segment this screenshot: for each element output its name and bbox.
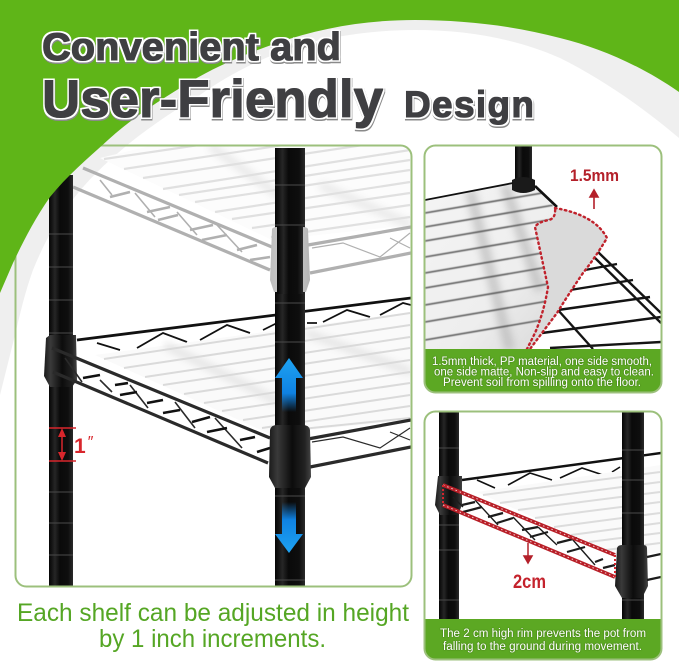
label: 1.5mm: 1.5mm — [570, 166, 619, 185]
caption: height adjustment — [17, 599, 409, 653]
title: User-Friendly — [42, 70, 384, 129]
back wire and zigzag — [462, 453, 661, 488]
lower shelf back wire — [77, 298, 411, 350]
icon: blue down arrow — [275, 502, 303, 553]
lower shelf front rim — [52, 348, 411, 467]
caption bar: liner — [425, 349, 661, 392]
poles — [439, 412, 644, 622]
panel border: rim — [424, 412, 662, 660]
lower shelf liner — [95, 312, 411, 434]
panel: shelf height adjustment — [44, 114, 411, 588]
panel border: liner — [424, 146, 662, 392]
upper shelf wire rim — [73, 168, 411, 273]
1 inch dimension marker — [49, 428, 94, 461]
red dotted rim highlight — [443, 485, 615, 577]
title: Design — [404, 84, 534, 125]
caption bar: liner: Prevent soil from spilling onto the floor. — [443, 377, 641, 389]
green corner shape — [0, 0, 679, 293]
lower connector — [269, 425, 311, 488]
1 inch dimension marker: 1 — [74, 435, 86, 458]
rim wires — [453, 497, 661, 580]
left connector — [44, 335, 77, 387]
caption bar: liner: one side matte, Non-slip and easy to clean. — [434, 366, 654, 378]
1 inch dimension marker: ″ — [88, 434, 94, 451]
upper shelf liner — [100, 146, 410, 238]
curled liner flap — [527, 208, 607, 349]
panel: liner thickness — [425, 146, 661, 350]
centre pole — [275, 148, 305, 588]
caption: height adjustment: Each shelf can be adjusted in height — [17, 599, 409, 627]
shelf liner — [482, 471, 660, 550]
caption bar: rim — [425, 619, 661, 659]
panel border: shelf height adjustment — [16, 146, 412, 586]
upper connector, faded — [270, 226, 310, 294]
caption bar: rim: The 2 cm high rim prevents the pot from — [440, 628, 646, 640]
connectors — [435, 476, 648, 598]
caption bar: rim: falling to the ground during movement. — [443, 641, 642, 653]
label: 1.5mm — [570, 166, 619, 209]
caption bar: liner: 1.5mm thick, PP material, one side smooth, — [432, 356, 652, 368]
title: Convenient and — [42, 26, 341, 69]
black wire grid — [542, 252, 661, 349]
left pole — [49, 175, 73, 587]
caption: height adjustment: by 1 inch increments. — [99, 625, 326, 653]
panel: rim height — [435, 412, 661, 622]
title — [42, 26, 534, 129]
rear pole and collar — [425, 146, 557, 207]
icon: blue up arrow — [275, 358, 303, 412]
label: 2cm: 2cm — [513, 572, 546, 593]
shelf liner with visible wires — [426, 184, 555, 349]
label: 2cm — [513, 543, 546, 593]
